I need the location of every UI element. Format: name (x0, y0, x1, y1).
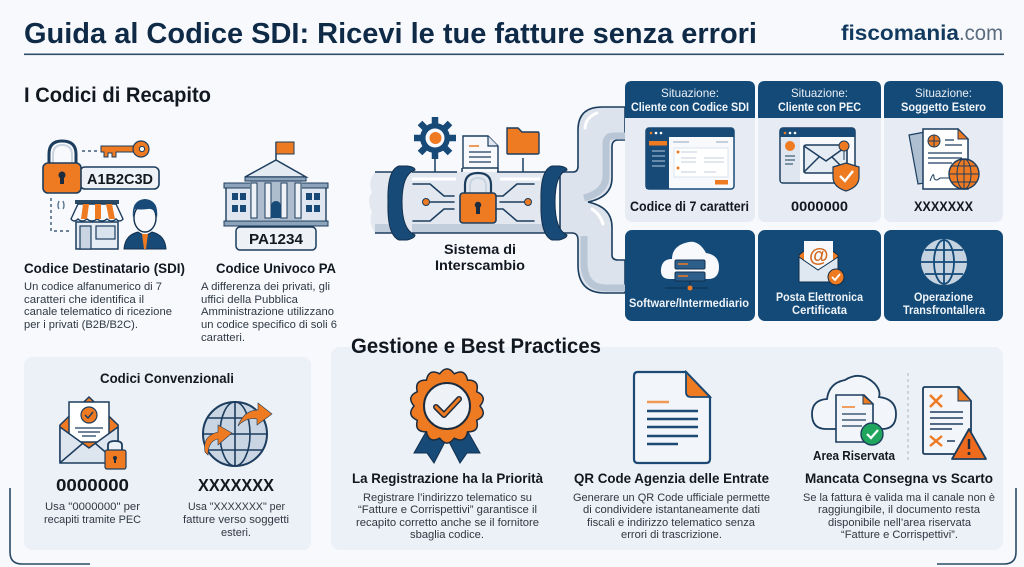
text block: Codice Univoco PA: Codice Univoco PA (216, 260, 336, 276)
diagram: Sistema di Interscambio pipeline: Sistema di (444, 241, 516, 257)
card: Operazione Transfrontaliera: Operazione (914, 291, 974, 304)
icon: rejected document with warning (923, 387, 986, 459)
panel: Codici Convenzionali: Usa "0000000" per (45, 501, 140, 513)
text block: Codice Destinatario: caratteri che identifica il (24, 294, 144, 306)
card: Posta Elettronica Certificata: Certificata (792, 304, 848, 317)
logo: fiscomania.com: .com (959, 22, 1003, 45)
panel: Gestione e Best Practices: Generare un QR Code ufficiale permette (573, 492, 770, 504)
icon: globe with arrows (203, 402, 272, 466)
panel: Gestione e Best Practices: Mancata Consegna vs Scarto (805, 470, 993, 486)
panel: Gestione e Best Practices: fiscali e indirizzo telematico senza (587, 517, 756, 529)
text block: Codice Univoco PA: uffici della Pubblica (201, 294, 299, 306)
panel: Codici Convenzionali: Codici Convenzionali (100, 371, 234, 386)
icon: cloud reserved area (812, 376, 896, 445)
card: Soggetto Estero: Soggetto Estero (901, 100, 986, 114)
panel: Gestione e Best Practices: “Fatture e Corrispettivi”. (841, 529, 958, 541)
icon: public administration building with PA code: PA1234 (249, 231, 304, 248)
icon: public administration building with PA code (224, 142, 328, 250)
card: Cliente con Codice SDI: Cliente con Codice SDI (631, 100, 749, 114)
panel: Gestione e Best Practices: Registrare l’indirizzo telematico su (363, 492, 532, 504)
heading: I Codici di Recapito: I Codici di Recapito (24, 84, 211, 107)
text block: Codice Univoco PA: A differenza dei privati, gli (201, 281, 330, 293)
icon: document (634, 372, 710, 463)
icon: PEC window with envelope and shield (780, 128, 859, 191)
icon: certified email: @ (809, 245, 829, 267)
text block: Codice Destinatario: per i privati (B2B/B2C). (24, 319, 138, 331)
panel: Gestione e Best Practices: La Registrazione ha la Priorità (352, 470, 543, 486)
card: Cliente con PEC: Cliente con PEC (778, 100, 861, 114)
card: Posta Elettronica Certificata (758, 230, 881, 321)
card: Soggetto Estero: Situazione: (915, 86, 972, 100)
card: Cliente con Codice SDI: Situazione: (661, 86, 719, 100)
card: Posta Elettronica Certificata: Posta Elettronica (776, 291, 863, 304)
card: Software/Intermediario (625, 230, 755, 321)
text block: Codice Univoco PA: caratteri. (201, 332, 245, 344)
icon: lock, key and SDI code (43, 141, 166, 249)
icon: globe (921, 239, 967, 285)
icon: lock, key and SDI code: A1B2C3D (87, 171, 153, 188)
panel: Gestione e Best Practices: errori di trascrizione. (621, 529, 722, 541)
panel: Codici Convenzionali: recapiti tramite PEC (44, 514, 141, 526)
text block: Codice Univoco PA: un codice specifico di soli 6 (201, 319, 337, 331)
card: Operazione Transfrontaliera (884, 230, 1003, 321)
logo: fiscomania.com: fiscomania (841, 22, 959, 45)
panel: Gestione e Best Practices (331, 335, 1003, 550)
panel: Gestione e Best Practices: “Fatture e Corrispettivi” garantisce il (358, 504, 537, 516)
panel: Codici Convenzionali: 0000000 (56, 475, 129, 495)
text block: Codice Destinatario (24, 260, 185, 331)
card: Software/Intermediario: Software/Intermediario (629, 297, 749, 310)
diagram: Sistema di Interscambio pipeline (369, 107, 625, 293)
panel: Gestione e Best Practices: di condividere istantaneamente dati (583, 504, 760, 516)
icon: cloud server (661, 242, 719, 290)
card: Cliente con Codice SDI: Codice di 7 caratteri (630, 199, 749, 214)
heading: Gestione e Best Practices: Gestione e Best Practices (351, 335, 601, 358)
text block: Codice Univoco PA (201, 260, 337, 344)
card: Cliente con PEC: Situazione: (791, 86, 848, 100)
card: Operazione Transfrontaliera: Transfrontallera (903, 304, 986, 317)
icon: envelope with lock (60, 397, 126, 469)
text block: Codice Destinatario: canale telematico di ricezione (24, 306, 172, 318)
text block: Codice Univoco PA: Amministrazione utilizzano (201, 306, 334, 318)
panel: Gestione e Best Practices: disponibile nell’area riservata (828, 517, 972, 529)
icon: foreign documents with globe (909, 129, 979, 189)
text block: Codice Destinatario: Un codice alfanumerico di 7 (24, 281, 162, 293)
panel: Gestione e Best Practices: QR Code Agenzia delle Entrate (574, 470, 769, 486)
panel: Codici Convenzionali: fatture verso soggetti (183, 514, 289, 526)
card: Cliente con PEC (758, 81, 881, 222)
title: Guida al Codice SDI: Ricevi le tue fatture senza errori (24, 18, 757, 50)
card: Soggetto Estero (884, 81, 1003, 222)
panel: Gestione e Best Practices: raggiungibile, il documento resta (818, 504, 981, 516)
panel: Codici Convenzionali (24, 357, 311, 550)
panel: Gestione e Best Practices: sbaglia codice. (410, 529, 484, 541)
icon: medal (411, 369, 483, 463)
card: Soggetto Estero: XXXXXXX (914, 199, 973, 214)
card: Cliente con PEC: 0000000 (791, 199, 848, 214)
panel: Gestione e Best Practices: Area Riservata (813, 448, 896, 463)
card: Cliente con Codice SDI (625, 81, 755, 222)
panel: Gestione e Best Practices: Se la fattura è valida ma il canale non è (803, 492, 995, 504)
diagram: Sistema di Interscambio pipeline: Interscambio (435, 257, 525, 273)
panel: Gestione e Best Practices: recapito corretto anche se il fornitore (356, 517, 539, 529)
panel: Codici Convenzionali: esteri. (221, 527, 251, 539)
icon: software window (646, 128, 734, 189)
panel: Codici Convenzionali: Usa "XXXXXXX" per (188, 501, 285, 513)
panel: Codici Convenzionali: XXXXXXX (198, 475, 274, 495)
text block: Codice Destinatario: Codice Destinatario (SDI) (24, 260, 185, 276)
